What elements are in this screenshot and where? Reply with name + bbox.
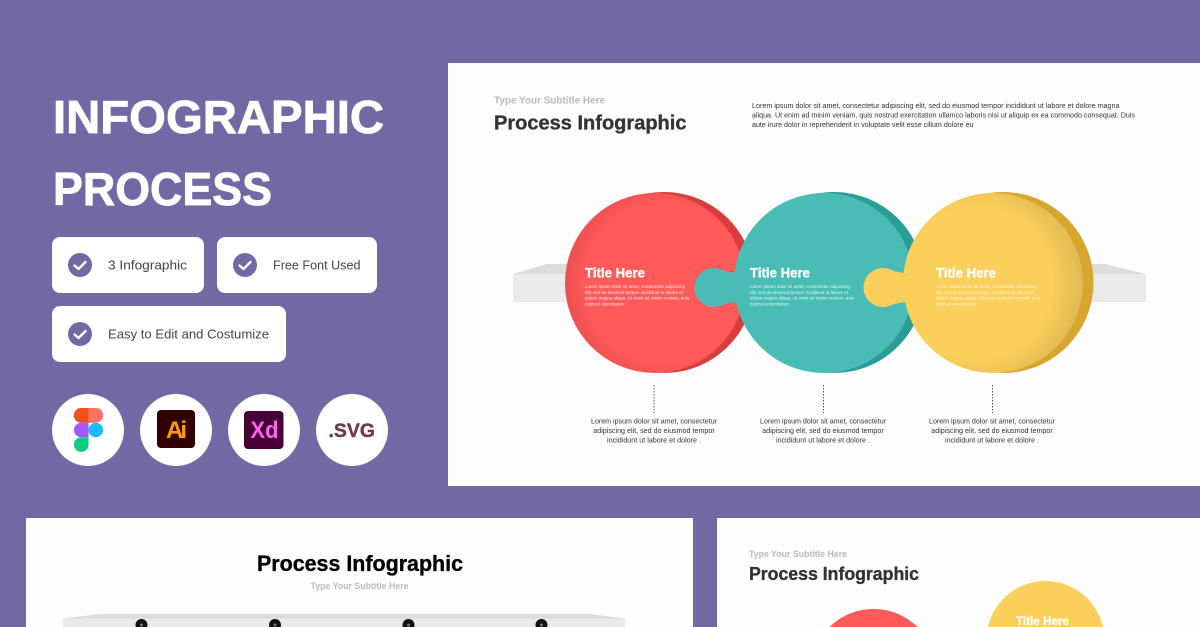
caption 2 with dotted connector: [760, 385, 887, 444]
step 3: yellow circle with puzzle knob: elit, sed do eiusmod tempor incididunt ut labore et: [936, 290, 1035, 295]
main heading: INFOGRAPHIC: [53, 91, 384, 143]
caption 1 with dotted connector: adipiscing elit, sed do eiusmod tempor: [593, 428, 715, 435]
feature chip: Free Font Used: Free Font Used: [273, 258, 360, 272]
caption 2 with dotted connector: adipiscing elit, sed do eiusmod tempor: [762, 428, 884, 435]
caption 3 with dotted connector: Lorem ipsum dolor sit amet, consectetur: [929, 418, 1056, 426]
step 3: yellow circle with puzzle knob: Lorem ipsum dolor sit amet, consectetur adipiscing: [936, 284, 1036, 289]
main heading: PROCESS: [53, 163, 272, 215]
caption 3 with dotted connector: adipiscing elit, sed do eiusmod tempor: [931, 428, 1053, 435]
caption 3 with dotted connector: [929, 385, 1056, 444]
panel heading: Type Your Subtitle Here: [494, 96, 605, 106]
panel heading: [494, 96, 686, 134]
caption 1 with dotted connector: [591, 385, 718, 444]
step 1: red circle: dolore magna aliqua. Ut enim ad minim veniam, quis: [585, 296, 690, 301]
intro paragraph: [752, 103, 1135, 129]
caption 1 with dotted connector: Lorem ipsum dolor sit amet, consectetur: [591, 418, 718, 426]
step 1: red circle: Title Here: [585, 265, 645, 280]
preview heading: Process Infographic: [749, 563, 919, 584]
yellow circle: [988, 581, 1103, 627]
intro paragraph: aliqua. Ut enim ad minim veniam, quis nostrud exercitation ullamco laboris nisi ut aliquip ex ea commodo consequat. Duis: [752, 112, 1135, 120]
step 1: red circle: nostrud exercitation: [585, 302, 624, 307]
step 2: teal circle with puzzle knob: Title Here: [750, 265, 810, 280]
step 1: red circle: elit, sed do eiusmod tempor incididunt ut labore et: [585, 290, 684, 295]
icon: Figma: [52, 394, 124, 466]
caption 3 with dotted connector: incididunt ut labore et dolore .: [945, 438, 1039, 444]
panel heading: Process Infographic: [494, 112, 686, 134]
shelf right: [1080, 264, 1146, 302]
caption 1 with dotted connector: incididunt ut labore et dolore .: [607, 438, 701, 444]
icon: SVG: [316, 394, 388, 466]
icon: Adobe XD: Xd: [250, 417, 278, 444]
red circle: [829, 609, 918, 627]
feature chip: Easy to Edit and Costumize: [52, 306, 286, 362]
icon: Adobe XD: [228, 394, 300, 466]
preview heading: Type Your Subtitle Here: [749, 549, 847, 560]
step 2: teal circle with puzzle knob: nostrud exercitation: [750, 302, 789, 307]
step 1: red circle: Lorem ipsum dolor sit amet, consectetur adipiscing: [585, 284, 685, 289]
preview heading: [257, 551, 463, 591]
step 3: yellow circle with puzzle knob: Title Here: [936, 265, 996, 280]
feature chip: 3 Infographic: 3 Infographic: [108, 258, 188, 272]
icon: Adobe Illustrator: [140, 394, 212, 466]
feature chip: Free Font Used: [217, 237, 377, 293]
caption 2 with dotted connector: Lorem ipsum dolor sit amet, consectetur: [760, 418, 887, 426]
shelf left: [513, 264, 580, 302]
preview heading: Type Your Subtitle Here: [310, 581, 408, 591]
intro paragraph: Lorem ipsum dolor sit amet, consectetur adipiscing elit, sed do eiusmod tempor incididunt ut labore et dolore magna: [752, 103, 1120, 110]
main heading: [53, 91, 384, 215]
preview pins: [136, 619, 548, 627]
icon: Adobe Illustrator: Ai: [166, 417, 187, 444]
intro paragraph: aute irure dolor in reprehenderit in voluptate velit esse cillum dolore eu: [752, 122, 974, 129]
panel: bottom-right preview: [717, 518, 1200, 627]
step 2: teal circle with puzzle knob: elit, sed do eiusmod tempor incididunt ut labore et: [750, 290, 849, 295]
step 3: yellow circle with puzzle knob: dolore magna aliqua. Ut enim ad minim veniam, quis: [936, 296, 1041, 301]
step 3: yellow circle with puzzle knob: nostrud exercitation: [936, 302, 975, 307]
step 2: teal circle with puzzle knob: Lorem ipsum dolor sit amet, consectetur adipiscing: [750, 284, 850, 289]
step 2: teal circle with puzzle knob: dolore magna aliqua. Ut enim ad minim veniam, quis: [750, 296, 855, 301]
step 1: red circle: [565, 192, 754, 373]
preview shelf: [63, 614, 625, 627]
icon: SVG: .SVG: [328, 420, 375, 442]
feature chip: 3 Infographic: [52, 237, 204, 293]
panel: three-step process infographic: [448, 63, 1200, 486]
step 3: yellow circle with puzzle knob: [864, 192, 1094, 373]
preview heading: [749, 549, 919, 584]
feature chip: Easy to Edit and Costumize: Easy to Edit and Costumize: [108, 326, 269, 342]
panel: bottom-left preview: [26, 518, 693, 627]
preview heading: Process Infographic: [257, 551, 463, 576]
step 2: teal circle with puzzle knob: [694, 192, 924, 373]
caption 2 with dotted connector: incididunt ut labore et dolore .: [776, 438, 870, 444]
